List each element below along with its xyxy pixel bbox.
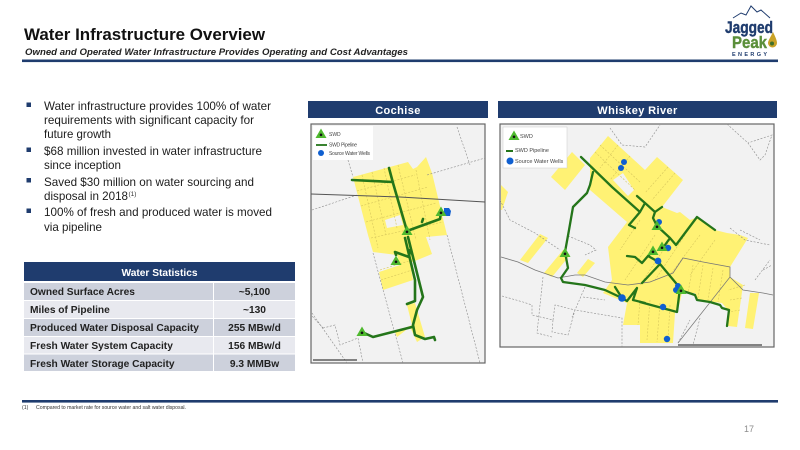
heading: Whiskey River	[498, 101, 777, 118]
row: fresh water system capacity: 156 MBw/d	[228, 341, 281, 352]
row: fresh water system capacity	[24, 337, 295, 354]
page number: 17	[744, 424, 754, 434]
legend: SWD Pipeline	[329, 142, 357, 148]
bullet 1: future growth	[44, 128, 111, 141]
legend: SWD	[520, 134, 533, 140]
bullet 4: via pipeline	[44, 221, 102, 234]
row: fresh water storage capacity: 9.3 MMBw	[230, 359, 279, 370]
legend	[313, 126, 373, 160]
footnote: Compared to market rate for source water and salt water disposal.	[36, 405, 186, 411]
logo: Jagged Peak Energy: Jagged	[725, 18, 773, 37]
SWD sites	[652, 220, 662, 230]
logo: Jagged Peak Energy: ENERGY	[732, 52, 767, 58]
bullet 1: Water infrastructure provides 100% of water	[44, 100, 271, 113]
footer rule	[22, 400, 778, 403]
scale bar	[678, 344, 762, 346]
map: Whiskey River	[500, 124, 774, 347]
acreage	[590, 136, 748, 343]
row: produced water disposal capacity: Produced Water Disposal Capacity	[30, 323, 199, 334]
row: owned surface acres: Owned Surface Acres	[30, 287, 135, 298]
bullet 2: since inception	[44, 159, 121, 172]
subtitle: Owned and Operated Water Infrastructure Provides Operating and Cost Advantages	[25, 47, 408, 58]
lease lines	[357, 165, 443, 280]
row: miles of pipeline: ~130	[243, 305, 266, 316]
bullet 1	[26, 100, 271, 141]
bullet 3: (1)	[128, 191, 136, 198]
row: fresh water storage capacity: Fresh Water Storage Capacity	[30, 359, 175, 370]
logo: Jagged Peak Energy	[725, 6, 777, 58]
lease lines	[595, 145, 745, 342]
legend: SWD Pipeline	[515, 148, 549, 154]
table header: Water Statistics	[121, 268, 198, 279]
bullet 4: 100% of fresh and produced water is moved	[44, 206, 272, 219]
county lines	[312, 127, 485, 363]
row: produced water disposal capacity: 255 MBw/d	[228, 323, 281, 334]
legend: Source Water Wells	[515, 159, 564, 165]
row: owned surface acres: ~5,100	[239, 287, 271, 298]
bullet 4	[26, 206, 272, 234]
SWD pipelines	[561, 157, 729, 326]
legend: SWD	[329, 132, 341, 138]
bullet 3	[26, 176, 254, 203]
table: water statistics	[24, 262, 295, 371]
row: produced water disposal capacity	[24, 319, 295, 336]
bullet 2: $68 million invested in water infrastructure	[44, 145, 262, 158]
county lines	[500, 124, 772, 347]
row: owned surface acres	[24, 283, 295, 300]
icon: mountain outline	[733, 6, 770, 18]
row: miles of pipeline	[24, 301, 295, 318]
heading: Whiskey River: Whiskey River	[597, 105, 678, 117]
header rule	[22, 60, 778, 62]
icon: oil drop	[768, 32, 777, 48]
bullet 3: disposal in 2018	[44, 190, 128, 203]
source water wells	[618, 159, 681, 342]
logo: Jagged Peak Energy: Peak	[732, 33, 767, 52]
heading: Cochise: Cochise	[375, 105, 421, 117]
bullet 2	[26, 145, 262, 172]
row: fresh water storage capacity	[24, 354, 295, 371]
source water wells	[444, 208, 451, 216]
heading: Cochise	[308, 101, 488, 118]
row: fresh water system capacity: Fresh Water System Capacity	[30, 341, 173, 352]
map: Cochise	[311, 124, 485, 363]
legend	[503, 127, 567, 168]
bullet 3: Saved $30 million on water sourcing and	[44, 176, 254, 189]
footnote: (1)	[22, 405, 29, 411]
acreage	[353, 157, 447, 290]
title: Water Infrastructure Overview	[24, 25, 266, 44]
legend: Source Water Wells	[329, 151, 370, 157]
table header	[24, 262, 295, 281]
bullet list	[26, 100, 272, 234]
scale bar	[313, 359, 357, 361]
SWD pipelines	[352, 168, 441, 340]
SWD sites	[436, 206, 446, 216]
row: miles of pipeline: Miles of Pipeline	[30, 305, 110, 316]
bullet 1: requirements with significant capacity for	[44, 114, 254, 127]
